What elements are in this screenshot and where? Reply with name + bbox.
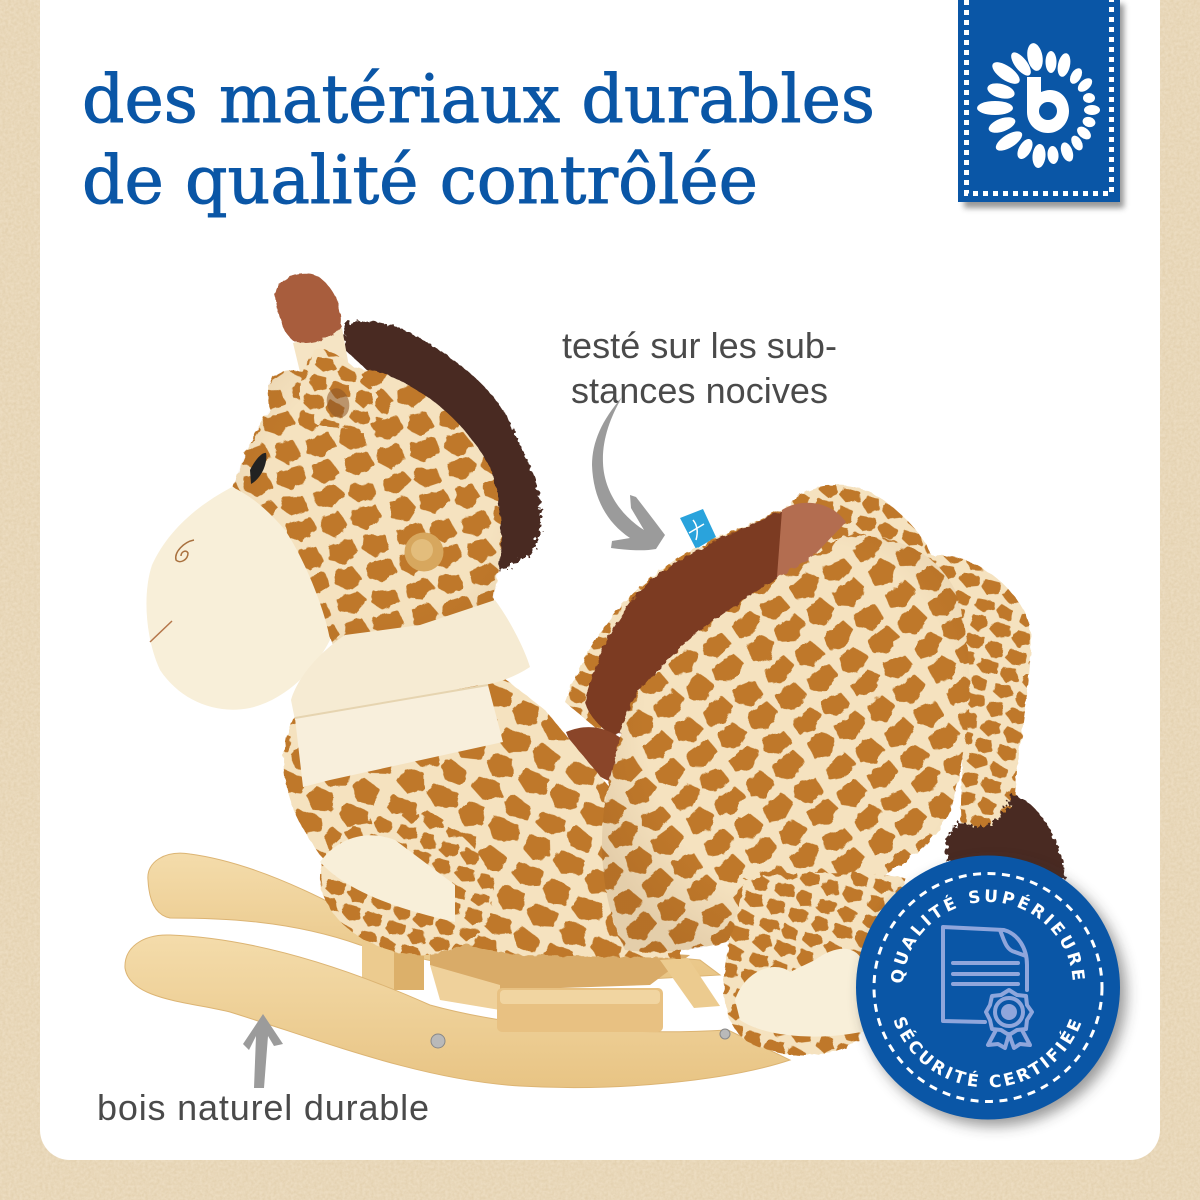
wooden foot rest: [497, 988, 663, 1032]
seat brown interior: [585, 511, 800, 736]
brand logo tag: [958, 0, 1124, 208]
horn stem: [293, 328, 350, 372]
blue safety tag: [680, 509, 716, 549]
ear: [300, 348, 385, 433]
label: natural wood: bois naturel durable: [97, 1087, 429, 1128]
icon: seal centre: [1001, 1004, 1017, 1020]
nostril swirl: [176, 540, 194, 562]
mouth: [150, 621, 172, 642]
badge bottom text: SÉCURITÉ CERTIFIÉE: [894, 1017, 1082, 1088]
badge top text: QUALITÉ SUPÉRIEURE: [891, 889, 1085, 982]
label: harmful substances: [562, 325, 837, 411]
rear paw: [724, 872, 905, 1055]
seat pink panel: [776, 503, 846, 590]
front rocker: [125, 935, 790, 1088]
scarf: [291, 600, 530, 787]
head: [233, 365, 501, 650]
quality badge: [853, 856, 1135, 1135]
rear rocker: [148, 853, 720, 985]
icon: flower b logo: [977, 42, 1100, 169]
arrow: to wood rocker: [243, 1014, 283, 1088]
label: harmful substances: stances nocives: [571, 370, 828, 411]
mane: [343, 321, 541, 572]
wooden peg handle: [404, 532, 444, 572]
screws: [431, 1029, 730, 1048]
front body: [284, 675, 700, 958]
eye: [250, 453, 266, 484]
front paw: [320, 813, 493, 955]
label: harmful substances: testé sur les sub-: [562, 325, 837, 366]
tail: [930, 555, 1031, 832]
wooden supports: [362, 935, 720, 1010]
product: rocking giraffe: [125, 273, 1066, 1088]
muzzle: [146, 487, 330, 710]
arrow: to safety tag: [592, 397, 665, 550]
seat rim: [565, 485, 940, 740]
seat lower brown: [566, 727, 630, 782]
rear body: [602, 535, 969, 952]
horn tip: [275, 273, 341, 343]
title: de qualité contrôlée: [82, 142, 758, 219]
title: [82, 61, 875, 219]
tail tuft: [946, 795, 1066, 880]
icon: letter b: [1027, 77, 1069, 133]
icon: certificate document: [943, 927, 1032, 1048]
title: des matériaux durables: [82, 61, 875, 138]
